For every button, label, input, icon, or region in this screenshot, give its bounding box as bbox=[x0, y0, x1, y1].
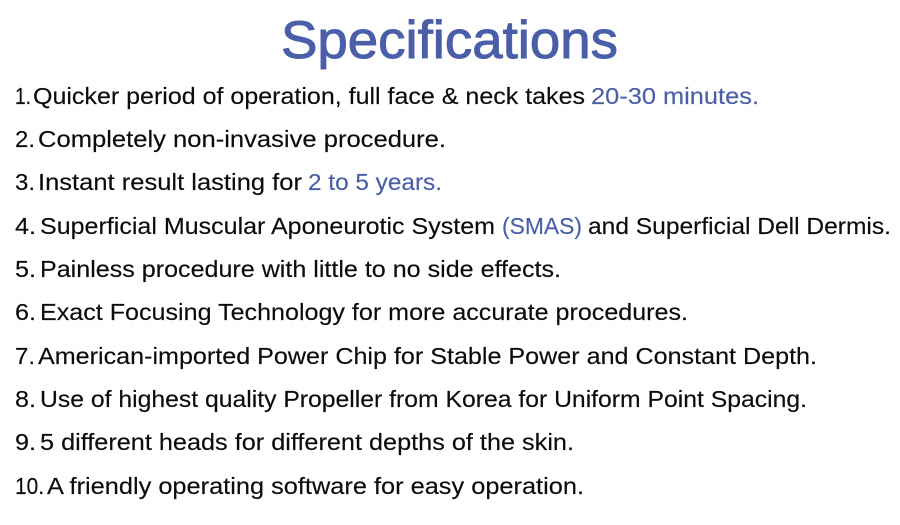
item 3: Instant result lasting for bbox=[38, 169, 302, 195]
item 8: 8. bbox=[15, 386, 36, 412]
item 7: American-imported Power Chip for Stable Power and Constant Depth. bbox=[38, 343, 817, 369]
item 1: 1. bbox=[15, 83, 31, 109]
item 2: Completely non-invasive procedure. bbox=[38, 126, 446, 152]
item 4: (SMAS) bbox=[502, 213, 582, 239]
item 4: 4. bbox=[15, 213, 36, 239]
item 6: Exact Focusing Technology for more accurate procedures. bbox=[40, 299, 688, 325]
item 9: 5 different heads for different depths of the skin. bbox=[40, 429, 574, 455]
item 2: 2. bbox=[15, 126, 35, 152]
item 7: 7. bbox=[15, 343, 35, 369]
item 6: 6. bbox=[15, 299, 36, 325]
item 10: A friendly operating software for easy operation. bbox=[47, 473, 584, 499]
title: Specifications bbox=[281, 11, 618, 70]
item 4: Superficial Muscular Aponeurotic System bbox=[40, 213, 495, 239]
item 3: 2 to 5 years. bbox=[308, 169, 442, 195]
item 1 bbox=[15, 83, 759, 109]
item 3: 3. bbox=[15, 169, 35, 195]
item 3 bbox=[15, 169, 442, 195]
item 10: 10. bbox=[15, 473, 44, 499]
item 5: Painless procedure with little to no side effects. bbox=[40, 256, 561, 282]
item 4: and Superficial Dell Dermis. bbox=[588, 213, 891, 239]
item 4 bbox=[15, 213, 891, 239]
spec list bbox=[15, 83, 891, 499]
item 9: 9. bbox=[15, 429, 36, 455]
item 8: Use of highest quality Propeller from Korea for Uniform Point Spacing. bbox=[40, 386, 807, 412]
item 1: 20-30 minutes. bbox=[591, 83, 759, 109]
item 1: Quicker period of operation, full face & neck takes bbox=[33, 83, 585, 109]
item 5: 5. bbox=[15, 256, 36, 282]
